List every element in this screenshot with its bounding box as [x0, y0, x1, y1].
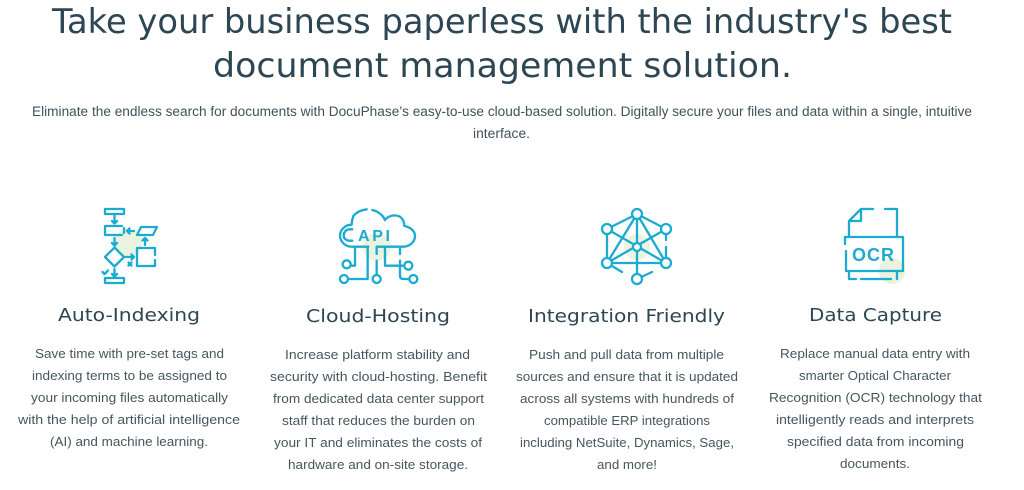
heading: Data Capture [809, 305, 942, 326]
subtitle: interface. [473, 126, 530, 141]
panel: data capture [769, 209, 982, 471]
icon: API cloud: API [358, 228, 390, 245]
body text: specified data from incoming [787, 434, 964, 449]
body text: smarter Optical Character [799, 368, 952, 383]
body text: staff that reduces the burden on [282, 413, 475, 428]
body text: intelligently reads and interprets [776, 412, 975, 427]
body text: from dedicated data center support [273, 391, 484, 406]
title: document management solution. [213, 46, 792, 86]
title [51, 2, 952, 86]
heading: Integration Friendly [528, 306, 725, 327]
body text: sources and ensure that it is updated [516, 369, 738, 384]
body text: Replace manual data entry with [780, 346, 970, 361]
body text: Increase platform stability and [285, 347, 470, 362]
body text [270, 347, 487, 472]
icon: API cloud [340, 209, 417, 283]
body text: Save time with pre-set tags and [35, 346, 224, 361]
body text: Push and pull data from multiple [529, 347, 724, 362]
body text: (AI) and machine learning. [50, 434, 208, 449]
body text: hardware and on-site storage. [288, 457, 468, 472]
body text: documents. [840, 456, 910, 471]
body text [769, 346, 982, 471]
panel: auto-indexing [17, 209, 240, 449]
body text: your incoming files automatically [31, 390, 229, 405]
panel: integration friendly [516, 209, 738, 472]
icon: flowchart [102, 209, 157, 283]
title: Take your business paperless with the industry's best [51, 2, 952, 42]
body text: Recognition (OCR) technology that [769, 390, 982, 405]
icon: network [602, 209, 671, 284]
icon: OCR document [845, 209, 905, 284]
body text [516, 347, 738, 472]
body text: and more! [597, 457, 657, 472]
body text: compatible ERP integrations [544, 413, 711, 428]
icon: OCR document: OCR [852, 245, 894, 265]
heading: Cloud-Hosting [306, 306, 450, 327]
body text: with the help of artificial intelligence [17, 412, 240, 427]
subtitle: Eliminate the endless search for documents with DocuPhase’s easy-to-use cloud-based solution. Digitally secure your files and data within a single, intuitive [32, 104, 972, 119]
body text: including NetSuite, Dynamics, Sage, [520, 435, 734, 450]
body text [17, 346, 240, 449]
body text: security with cloud-hosting. Benefit [270, 369, 487, 384]
panel: cloud-hosting [270, 209, 487, 472]
heading: Auto-Indexing [58, 305, 200, 326]
body text: indexing terms to be assigned to [32, 368, 227, 383]
body text: across all systems with hundreds of [520, 391, 734, 406]
subtitle [32, 104, 972, 141]
body text: your IT and eliminates the costs of [274, 435, 482, 450]
